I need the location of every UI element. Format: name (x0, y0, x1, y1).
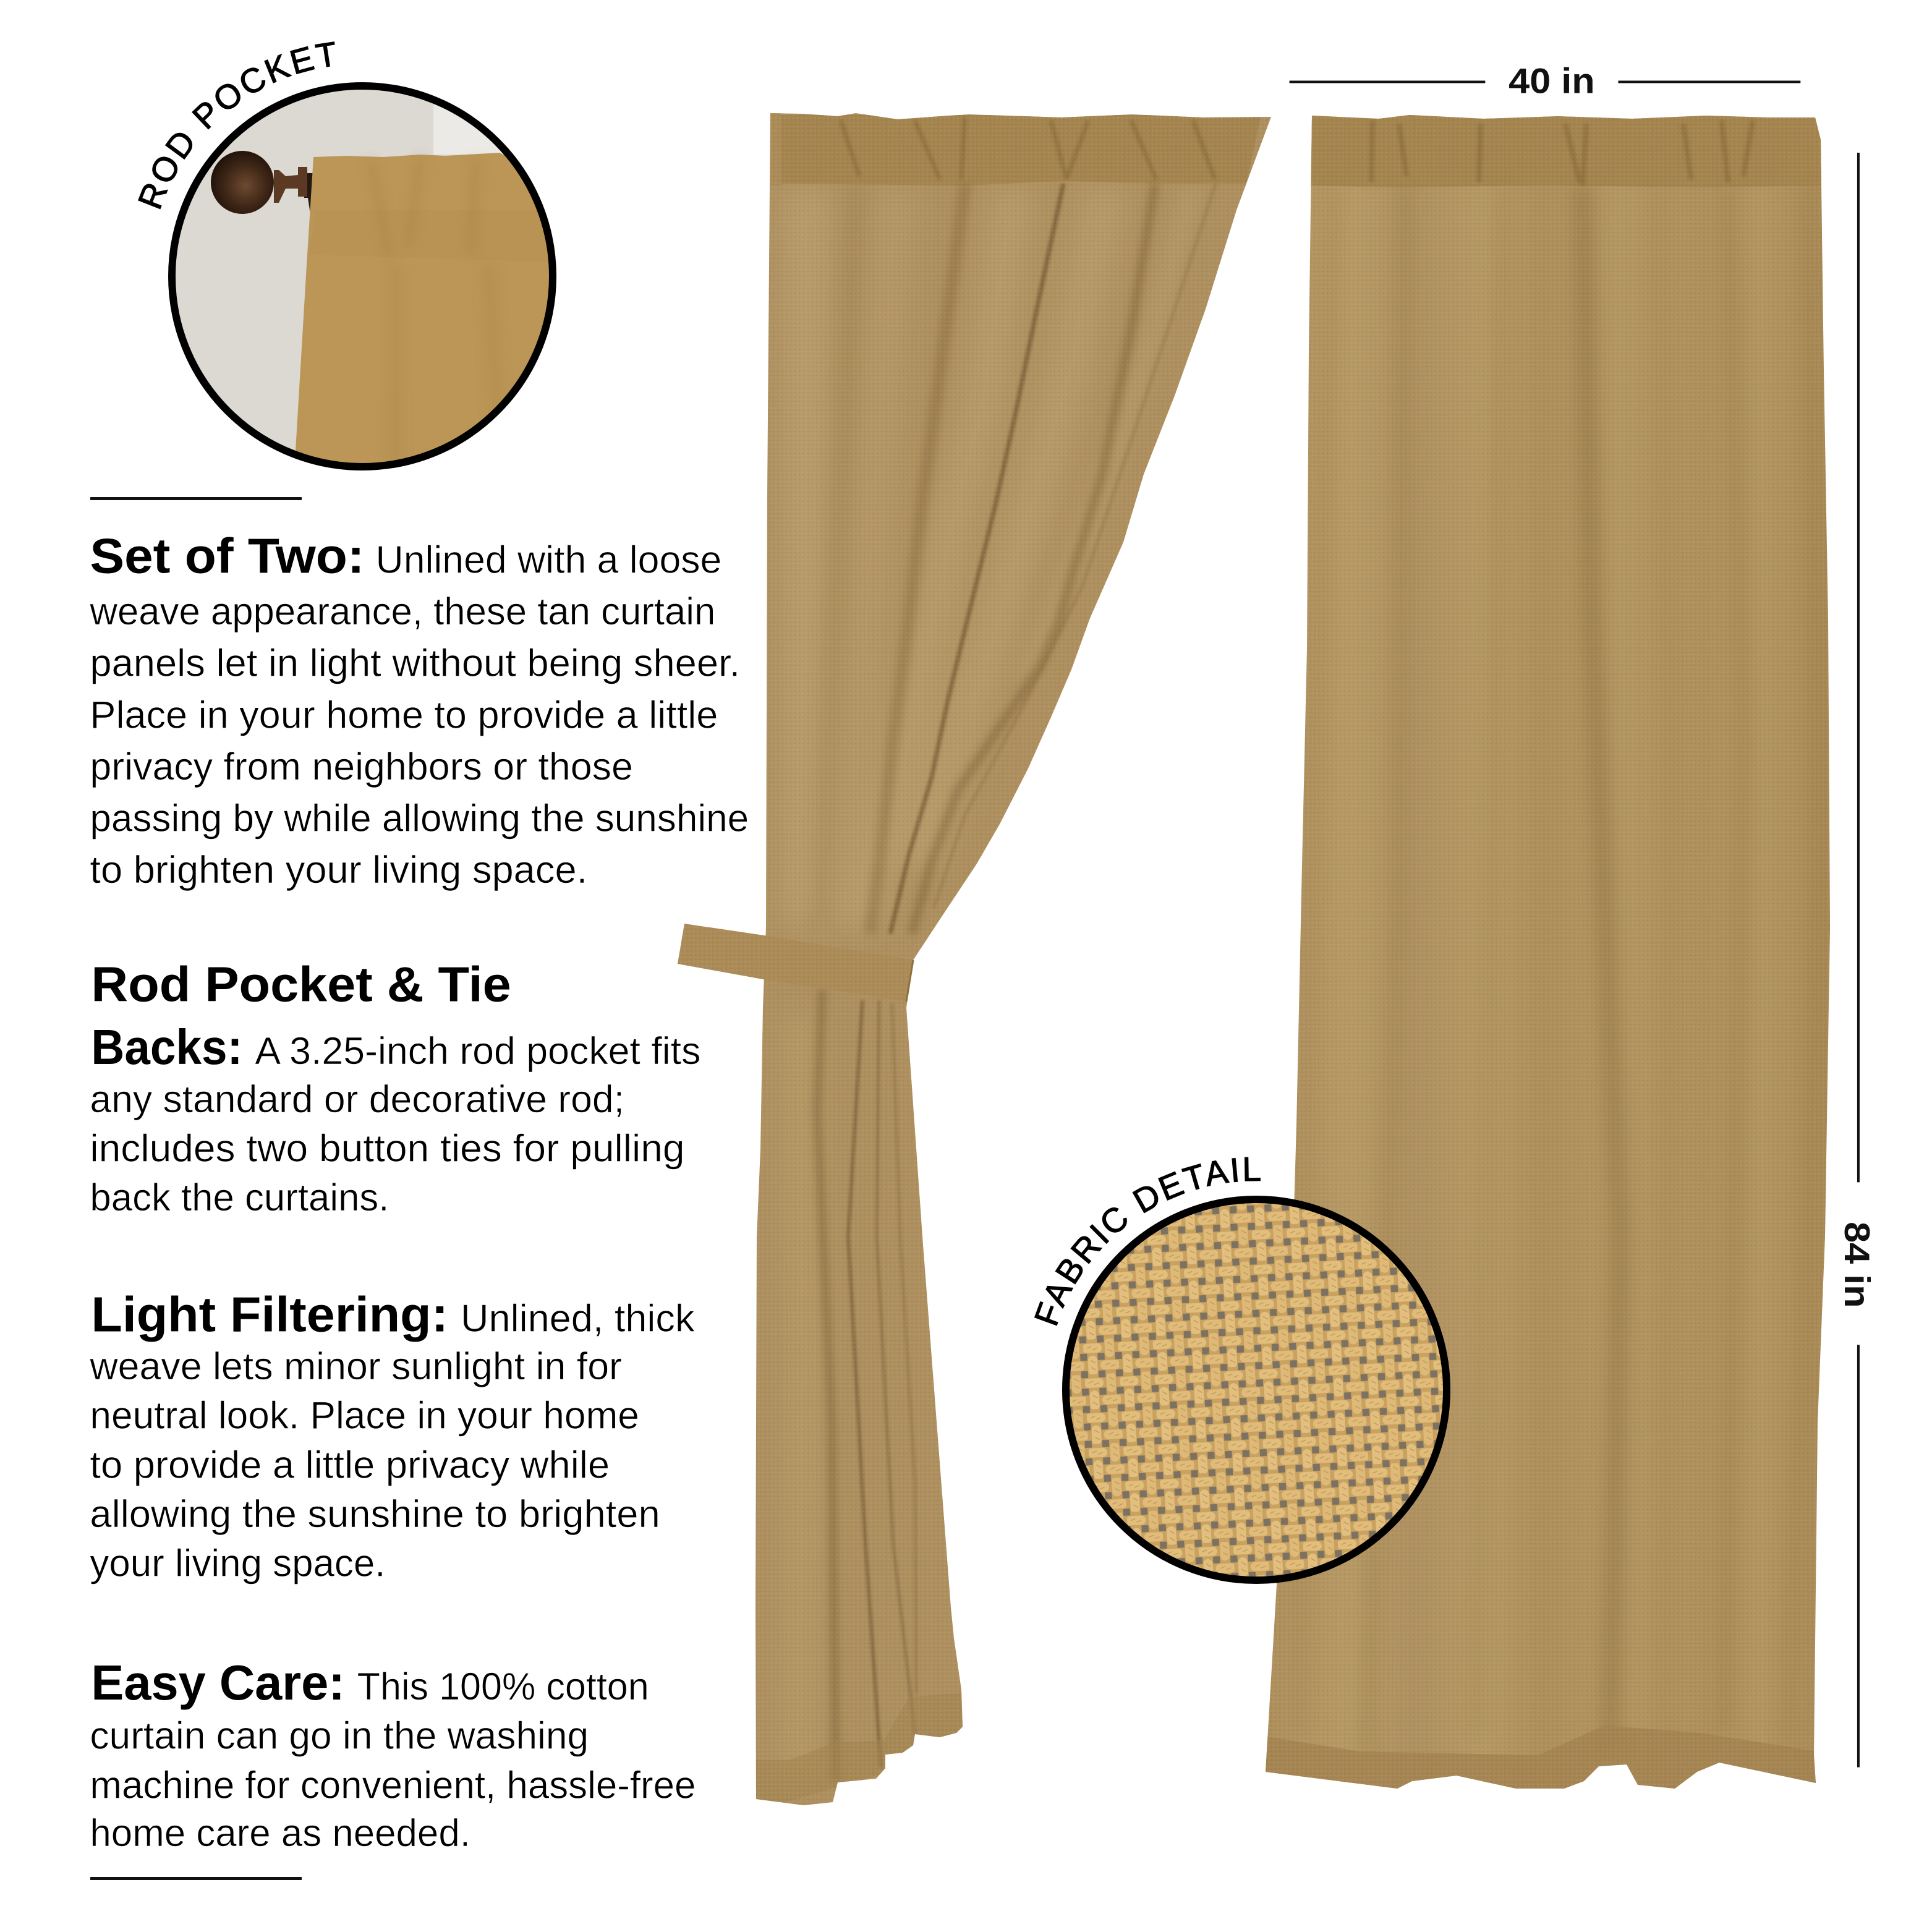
text block: easy care: Easy Care: (91, 1655, 345, 1710)
text block: light filtering: allowing the sunshine to brighten (90, 1493, 660, 1536)
gathers (1371, 121, 1753, 185)
text block: light filtering: Light Filtering: (91, 1287, 448, 1342)
text block: rod pocket and tie backs (90, 956, 700, 1219)
text block: easy care: This 100% cotton (357, 1666, 649, 1708)
left curtain panel gathered with tie back (678, 105, 1298, 1824)
text block: set of two: Set of Two: (90, 528, 365, 583)
pocket gathers (841, 117, 1215, 179)
text block: set of two: Place in your home to provide a little (90, 694, 718, 736)
vertical folds (1366, 185, 1403, 1756)
text block: set of two: passing by while allowing the sunshine (90, 798, 749, 840)
text block: easy care: machine for convenient, hassle-free (90, 1764, 696, 1806)
height dimension: 84 in: 84 in (1837, 1222, 1876, 1308)
text block: set of two: Unlined with a loose (376, 538, 721, 581)
text block: rod pocket and tie backs: Rod Pocket & Tie (91, 956, 511, 1011)
text block: light filtering: Unlined, thick (461, 1297, 695, 1340)
text block: rod pocket and tie backs: back the curtains. (90, 1177, 389, 1219)
rod pocket band (1304, 115, 1830, 187)
lower folds (817, 989, 836, 1781)
curtain fabric (291, 153, 563, 488)
fabric detail curved label: FABRIC DETAIL (1034, 1157, 1261, 1326)
text block: easy care: curtain can go in the washing (90, 1715, 589, 1758)
text block: rod pocket and tie backs: any standard or decorative rod; (90, 1078, 624, 1121)
text block: rod pocket and tie backs: Backs: (91, 1019, 242, 1075)
height dimension: 84 in (1837, 153, 1876, 1768)
tie back strap (678, 924, 913, 1002)
text block: light filtering (89, 1287, 695, 1585)
text block: easy care: home care as needed. (90, 1812, 470, 1855)
text block: light filtering: neutral look. Place in your home (90, 1395, 639, 1437)
text block: light filtering: weave lets minor sunlight in for (89, 1345, 622, 1388)
finial ball (211, 151, 274, 214)
width dimension: 40 in: 40 in (1509, 61, 1595, 101)
text block: rod pocket and tie backs: includes two button ties for pulling (90, 1127, 685, 1170)
bottom hem (754, 1693, 964, 1811)
text block: set of two: panels let in light without being sheer. (90, 642, 740, 685)
rod pocket band (781, 115, 1261, 185)
rod pocket inset circle (167, 80, 563, 488)
text block: set of two: privacy from neighbors or those (90, 746, 633, 788)
text block: light filtering: to provide a little privacy while (90, 1444, 610, 1486)
rod bracket (304, 173, 323, 226)
drape folds (870, 184, 965, 934)
finial neck (274, 167, 307, 203)
text block: set of two: weave appearance, these tan curtain (89, 590, 715, 633)
bottom hem (1255, 1726, 1830, 1811)
white door trim (433, 80, 556, 155)
bottom divider (90, 1877, 302, 1880)
text block: set of two: to brighten your living space. (90, 849, 587, 892)
text block: rod pocket and tie backs: A 3.25-inch rod pocket fits (255, 1030, 700, 1073)
text block: easy care (90, 1655, 696, 1855)
top divider (90, 497, 302, 500)
text block: set of two (89, 528, 749, 892)
fabric detail inset circle (1051, 1187, 1459, 1595)
rod pocket curved label: ROD POCKET (138, 41, 335, 209)
text block: light filtering: your living space. (90, 1543, 385, 1585)
width dimension: 40 in (1290, 61, 1800, 101)
pale sheer bands following the drape (804, 185, 807, 927)
right curtain panel (1255, 105, 1842, 1811)
